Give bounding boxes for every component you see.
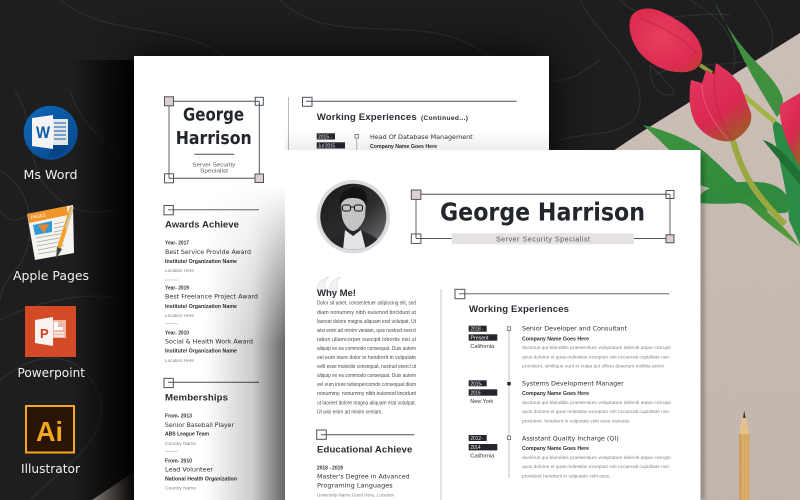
section: Memberships [164, 378, 259, 491]
shadow of front page on paper, right side [699, 155, 704, 500]
label: Apple Pages: Apple Pages [13, 269, 89, 283]
icon: Ms Word: W [36, 123, 51, 142]
leaf: big lower [643, 125, 800, 247]
icon: Powerpoint: P [40, 326, 49, 341]
shadow of rear resume page, left falloff [70, 60, 134, 500]
section: Why Me: ut laoreet dolore magna aliquam erat volutpat. [317, 400, 416, 406]
section: Awards Achieve: Location Here [165, 268, 194, 273]
name frame [164, 97, 264, 183]
section: Awards Achieve: Institute/ Organization Name [165, 349, 237, 355]
section: Working Experiences continued: Jul 2015 [318, 144, 335, 150]
section: Working Experiences continued: Company Name Goes Here [370, 144, 437, 150]
name frame: Server Security Specialist [496, 236, 590, 244]
tulip bouquet [629, 0, 800, 247]
icon: Apple Pages: PAGES [30, 212, 46, 220]
section: Educational Achieve: Programing Languages [317, 482, 393, 490]
section: Awards Achieve: Best Service Provide Award [165, 248, 251, 256]
section: Working Experiences continued: Head Of Database Management [370, 133, 473, 141]
section: Awards Achieve: Year- 2010 [165, 331, 189, 337]
name frame: Server Security [192, 162, 236, 168]
section: Awards Achieve: Year- 2017 [165, 241, 189, 247]
icon: Apple Pages [27, 205, 74, 260]
section: Working Experiences: Working Experiences [469, 304, 569, 315]
section: Working Experiences continued: Working Experiences [317, 112, 417, 123]
section: Working Experiences continued [288, 97, 517, 150]
section: Why Me: vel eum iriure tationpercomdo consequat diam [317, 382, 417, 388]
section: Why Me: velit esse molestie consequat, nostrud exerci ut [317, 364, 416, 370]
section: Memberships: From- 2010 [165, 458, 192, 464]
section: Memberships: Lead Volunteer [165, 466, 213, 474]
stem: side [743, 95, 775, 122]
experience: Assistant Quality Incharge: 2012- [470, 436, 483, 442]
section: Why Me: laoreet dolore magna aliquam erat volutpat. Ut [317, 319, 416, 325]
tulip: middle [690, 63, 751, 141]
section: Awards Achieve: Awards Achieve [165, 220, 239, 231]
section: Memberships: From- 2013 [165, 414, 192, 420]
experience: Systems Development Manager: Systems Development Manager [522, 380, 624, 388]
name frame: Specialist [200, 168, 229, 174]
icon: Ms Word [24, 106, 78, 160]
section: Why Me: aliquip ex ea commodo consequat. Duis autem [317, 373, 417, 379]
tulip: top [629, 8, 702, 72]
experience: Systems Development Manager: New York [470, 399, 494, 405]
shadow of rear resume page [134, 56, 549, 500]
experience: Assistant Quality Incharge: ducimus qui blanditiis praesentium voluptatum deleniti atque corrupti [522, 455, 671, 460]
section: Why Me: vel eum iriure dolor in hendrerit in vulputate [317, 355, 416, 361]
name frame [411, 190, 674, 244]
section: Educational Achieve: 2018 - 2019 [317, 465, 343, 471]
experience: Senior Developer: Present [470, 336, 489, 342]
section: Educational Achieve: University Name Goes Here, Location [317, 493, 394, 498]
tulip: right [780, 93, 800, 167]
leaf: right thin [763, 140, 800, 185]
experience: Systems Development Manager: quos dolores et quas molestias excepturi sint occaecati cupiditate non [522, 409, 669, 414]
section: Awards Achieve: Location Here [165, 313, 194, 318]
section: Awards Achieve: Institute/ Organization Name [165, 259, 237, 265]
section: Educational Achieve: Master's Degree in Advanced [317, 473, 410, 481]
icon: Powerpoint [25, 306, 76, 357]
section: Awards Achieve [164, 206, 259, 363]
section: Memberships: National Health Organization [165, 476, 238, 482]
section: Why Me: aliquip ex ea commodo consequat. Duis autem [317, 346, 417, 352]
section: Memberships: Memberships [165, 393, 228, 404]
experience: Senior Developer: Senior Developer and Consultant [522, 325, 627, 333]
section: Memberships: Country Name [165, 441, 196, 446]
section: Why Me: Dolor sit amet, consectetuer adipiscing elit, sed [317, 301, 416, 307]
section: Why Me: wisi enim ad minim veniam, quis nostrud exerci [317, 328, 416, 334]
section: Why Me: tation ullamcorper suscipit lobortis nisl ut [317, 337, 417, 343]
column divider [440, 289, 442, 500]
icon: quote mark [317, 277, 341, 293]
experience: Assistant Quality Incharge: quos dolores et quas molestias excepturi sint occaecati cupiditate non [522, 464, 669, 469]
panel: front resume page [285, 150, 700, 500]
experience: Assistant Quality Incharge: California [470, 454, 495, 460]
section: Why Me: nonummy. nonummy nibh euismod tincidunt [317, 391, 417, 397]
timeline [507, 327, 511, 478]
section: Awards Achieve: Best Freelance Project Award [165, 293, 258, 301]
section: Memberships: Senior Baseball Player [165, 421, 234, 429]
experience: Senior Developer: California [470, 344, 495, 350]
section: Educational Achieve [317, 430, 414, 498]
leaf: top narrow [714, 0, 783, 117]
name frame: Harrison [176, 128, 252, 149]
experience: Senior Developer: Company Name Goes Here [522, 336, 589, 342]
experience: Senior Developer: quos dolores et quas molestias excepturi sint occaecati cupiditate non [522, 354, 669, 359]
icon: Illustrator: Ai [36, 416, 63, 447]
section: Awards Achieve: Year- 2019 [165, 286, 189, 292]
section: Working Experiences continued: (Continued...) [421, 115, 468, 122]
section: Working Experiences [455, 289, 671, 478]
experience: Senior Developer: provident, similique sunt in culpa qui officia deserunt mollitia animi. [522, 363, 665, 368]
section: Awards Achieve: Institute/ Organization Name [165, 304, 237, 310]
experience: Systems Development Manager [469, 380, 671, 423]
shadow of front page on rear page, left side [213, 194, 285, 500]
experience: Senior Developer: ducimus qui blanditiis praesentium voluptatum deleniti atque corrupti [522, 345, 671, 350]
icon: Illustrator [26, 406, 74, 452]
leaf: right [773, 121, 800, 245]
experience: Senior Developer [469, 325, 671, 368]
section: Educational Achieve: Educational Achieve [317, 444, 412, 455]
name frame: George [183, 105, 244, 126]
section: Memberships: Country Name [165, 486, 196, 491]
name frame: George Harrison [440, 198, 645, 227]
stem: main [733, 141, 785, 224]
photo: portrait [317, 180, 390, 253]
label: Ms Word: Ms Word [24, 168, 78, 182]
label: Illustrator: Illustrator [21, 462, 80, 476]
experience: Assistant Quality Incharge: Assistant Quality Incharge (QI) [522, 435, 619, 443]
section: Awards Achieve: Location Here [165, 358, 194, 363]
section: Why Me: diam nonummy nibh euismod tincidunt ut [317, 310, 417, 316]
experience: Systems Development Manager: provident. hendrerit in vulputate velit esse molestie. [522, 418, 631, 423]
experience: Systems Development Manager: 2016 [470, 390, 481, 396]
experience: Systems Development Manager: Company Name Goes Here [522, 391, 589, 397]
experience: Assistant Quality Incharge [469, 435, 671, 478]
experience: Senior Developer: 2018 - [470, 327, 484, 333]
experience: Systems Development Manager: ducimus qui blanditiis praesentium voluptatum deleniti atque corrupti [522, 400, 671, 405]
experience: Assistant Quality Incharge: provident hendrerit in vulputate velit esse. [522, 473, 611, 478]
shadow of front page on rear page, top side [285, 130, 549, 150]
section: Awards Achieve: Social & Health Work Award [165, 337, 253, 345]
section: Why Me: Ut wisi enim ad minim veniam. [317, 409, 383, 415]
section: Working Experiences continued: 2015 - [318, 135, 332, 141]
section: Memberships: ABS League Team [165, 432, 209, 438]
experience: Assistant Quality Incharge: 2014 [470, 445, 481, 451]
leaf: lower middle [700, 182, 788, 213]
experience: Assistant Quality Incharge: Company Name Goes Here [522, 446, 589, 452]
experience: Systems Development Manager: 2015- [470, 381, 483, 387]
label: Powerpoint: Powerpoint [18, 366, 85, 380]
panel: rear resume page [134, 56, 550, 500]
section: Why Me [317, 277, 417, 415]
section: Why Me: Why Me! [317, 288, 356, 299]
pencil [739, 410, 750, 500]
